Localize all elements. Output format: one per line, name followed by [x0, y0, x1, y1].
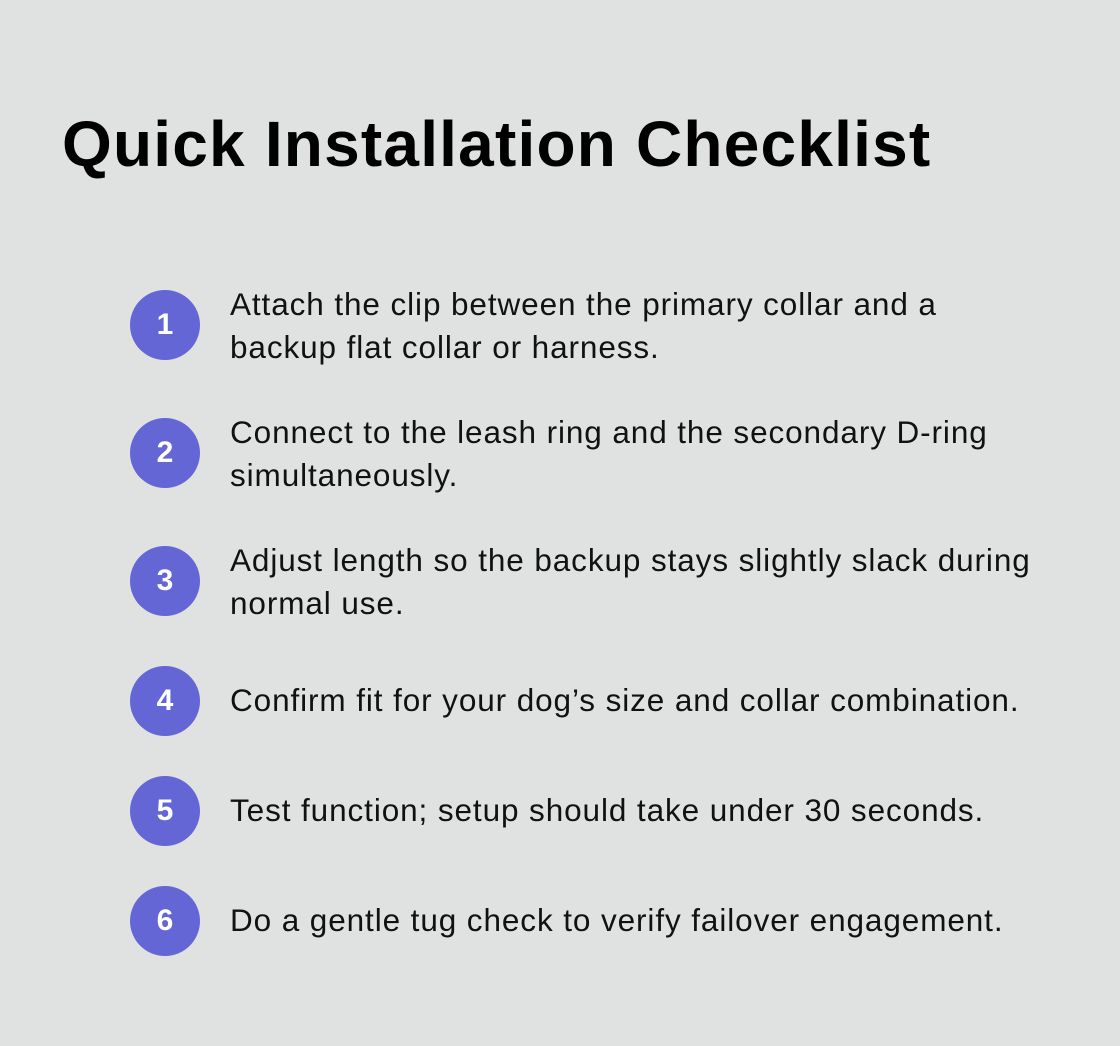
text 5: Test function; setup should take under 30 seconds. — [230, 792, 984, 828]
icon: number 3 — [130, 546, 200, 616]
step 6 — [130, 886, 1003, 956]
icon: number 4: 4 — [157, 684, 173, 717]
step 1 — [130, 286, 937, 365]
icon: number 5: 5 — [157, 794, 173, 827]
step 2 — [130, 414, 988, 493]
icon: number 3: 3 — [157, 564, 173, 597]
icon: number 2: 2 — [157, 436, 173, 469]
icon: number 1: 1 — [157, 308, 173, 341]
title: Quick Installation Checklist — [62, 108, 931, 180]
icon: number 4 — [130, 666, 200, 736]
icon: number 6: 6 — [157, 904, 173, 937]
text 6: Do a gentle tug check to verify failover engagement. — [230, 902, 1003, 938]
icon: number 5 — [130, 776, 200, 846]
text 4: Confirm fit for your dog’s size and collar combination. — [230, 682, 1020, 718]
step 3 — [130, 542, 1031, 621]
icon: number 1 — [130, 290, 200, 360]
icon: number 2 — [130, 418, 200, 488]
step 5 — [130, 776, 984, 846]
text 1: Attach the clip between the primary collar and a backup flat collar or harness. — [230, 286, 937, 365]
icon: number 6 — [130, 886, 200, 956]
text 2: Connect to the leash ring and the secondary D-ring simultaneously. — [230, 414, 988, 493]
step 4 — [130, 666, 1020, 736]
text 3: Adjust length so the backup stays slightly slack during normal use. — [230, 542, 1031, 621]
